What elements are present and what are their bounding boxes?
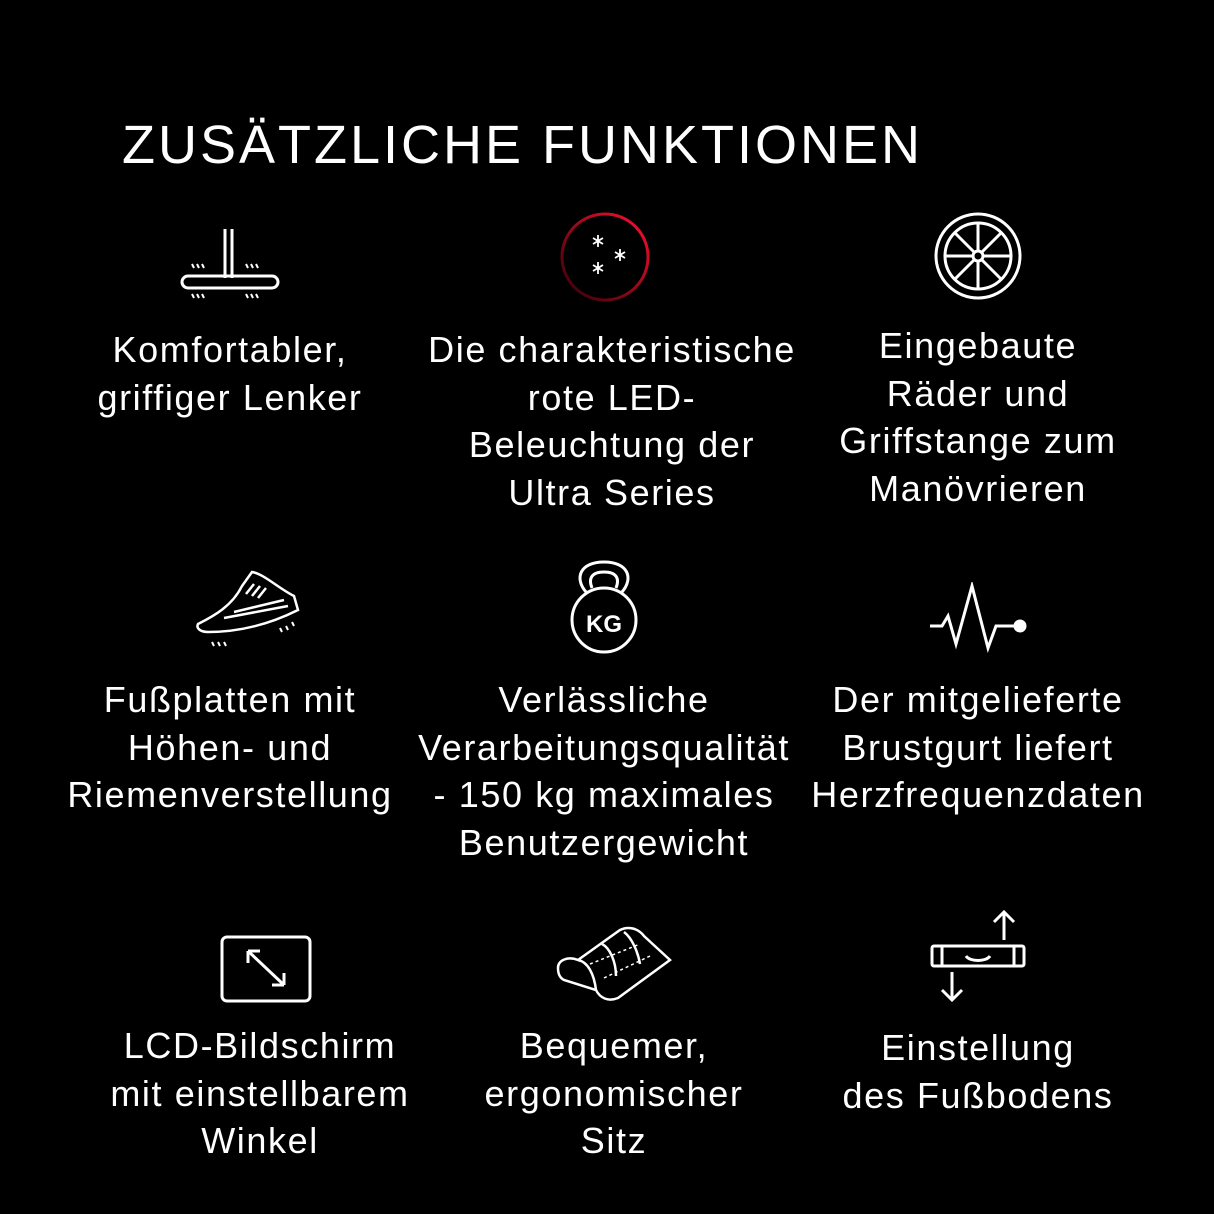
text: heart rate: Brustgurt liefert <box>842 726 1114 768</box>
icon: kettlebell <box>570 560 638 654</box>
text: seat: ergonomischer <box>485 1072 743 1114</box>
text: handlebar <box>97 329 363 418</box>
icon: floor level <box>930 910 1026 1002</box>
text: seat: Sitz <box>581 1120 647 1161</box>
text: kettlebell: Verarbeitungsqualität <box>418 726 790 768</box>
text: wheel: Eingebaute <box>879 325 1077 366</box>
text: wheel: Manövrieren <box>869 468 1087 508</box>
text: footplates: Fußplatten mit <box>104 679 356 720</box>
text: kettlebell: - 150 kg maximales <box>434 774 774 815</box>
text: kettlebell <box>418 679 790 862</box>
text: heart rate <box>811 679 1145 815</box>
text: LCD: Winkel <box>201 1120 319 1161</box>
text: wheel <box>839 325 1117 508</box>
text: footplates: Höhen- und <box>128 726 332 768</box>
text: footplates <box>67 679 393 815</box>
text: LED: Ultra Series <box>508 472 716 512</box>
text: LCD <box>110 1025 410 1161</box>
text: LED: rote LED- <box>528 376 696 418</box>
icon: seat <box>556 926 672 1001</box>
text: floor: des Fußbodens <box>843 1074 1113 1116</box>
text: seat: Bequemer, <box>520 1025 708 1066</box>
icon: heart rate <box>930 582 1026 653</box>
text: handlebar: Komfortabler, <box>113 329 347 370</box>
text: kettlebell: Verlässliche <box>498 679 710 720</box>
text: heart rate: Herzfrequenzdaten <box>811 774 1145 815</box>
icon: kettlebell: KG <box>586 611 622 638</box>
text: LED: Beleuchtung der <box>469 424 755 465</box>
text: handlebar: griffiger Lenker <box>97 376 363 418</box>
text: floor <box>843 1027 1113 1116</box>
text: seat <box>485 1025 743 1161</box>
text: LCD: LCD-Bildschirm <box>124 1025 396 1066</box>
text: floor: Einstellung <box>881 1027 1075 1068</box>
text: wheel: Räder und <box>887 372 1069 414</box>
text: kettlebell: Benutzergewicht <box>459 822 749 862</box>
text: wheel: Griffstange zum <box>839 420 1117 461</box>
icon: LCD screen <box>220 936 312 1002</box>
text: footplates: Riemenverstellung <box>67 774 393 815</box>
icon: wheel <box>934 212 1022 300</box>
icon: handlebar <box>180 229 280 298</box>
icon: LED <box>560 212 650 302</box>
text: LCD: mit einstellbarem <box>110 1072 410 1114</box>
text: heart rate: Der mitgelieferte <box>832 679 1124 720</box>
title: ZUSÄTZLICHE FUNKTIONEN <box>122 115 923 175</box>
text: LED <box>428 329 796 512</box>
icon: shoe <box>196 570 300 646</box>
text: LED: Die charakteristische <box>428 329 796 370</box>
